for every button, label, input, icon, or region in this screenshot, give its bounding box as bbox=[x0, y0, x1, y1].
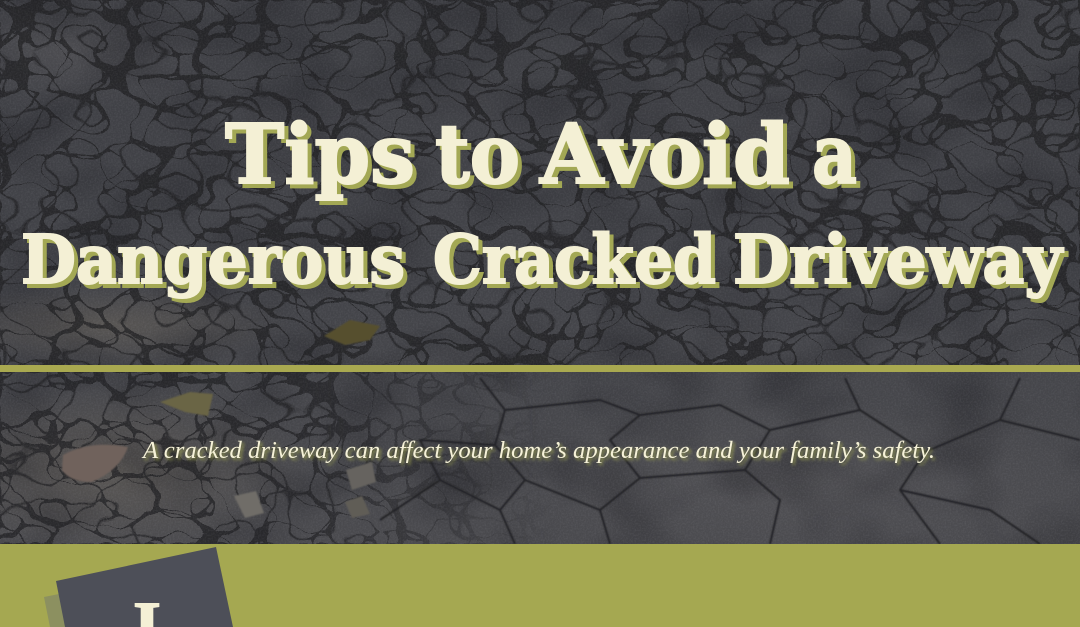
subtitle: A cracked driveway can affect your home’s appearance and your family’s safety. bbox=[141, 438, 935, 464]
title line 2: Dangerous bbox=[21, 220, 405, 299]
divider bar bbox=[0, 365, 1080, 372]
step number card bbox=[44, 547, 233, 627]
card bbox=[56, 547, 233, 627]
title bbox=[21, 107, 1064, 299]
title line 1: a bbox=[812, 107, 857, 203]
title line 1: Avoid bbox=[539, 107, 790, 203]
card shadow bbox=[44, 594, 65, 627]
title line 1: to bbox=[435, 107, 520, 203]
title line 2: Cracked bbox=[433, 220, 716, 299]
green section band bbox=[0, 544, 1080, 627]
title line 1: Tips bbox=[225, 107, 415, 203]
title line 2: Driveway bbox=[733, 220, 1064, 299]
